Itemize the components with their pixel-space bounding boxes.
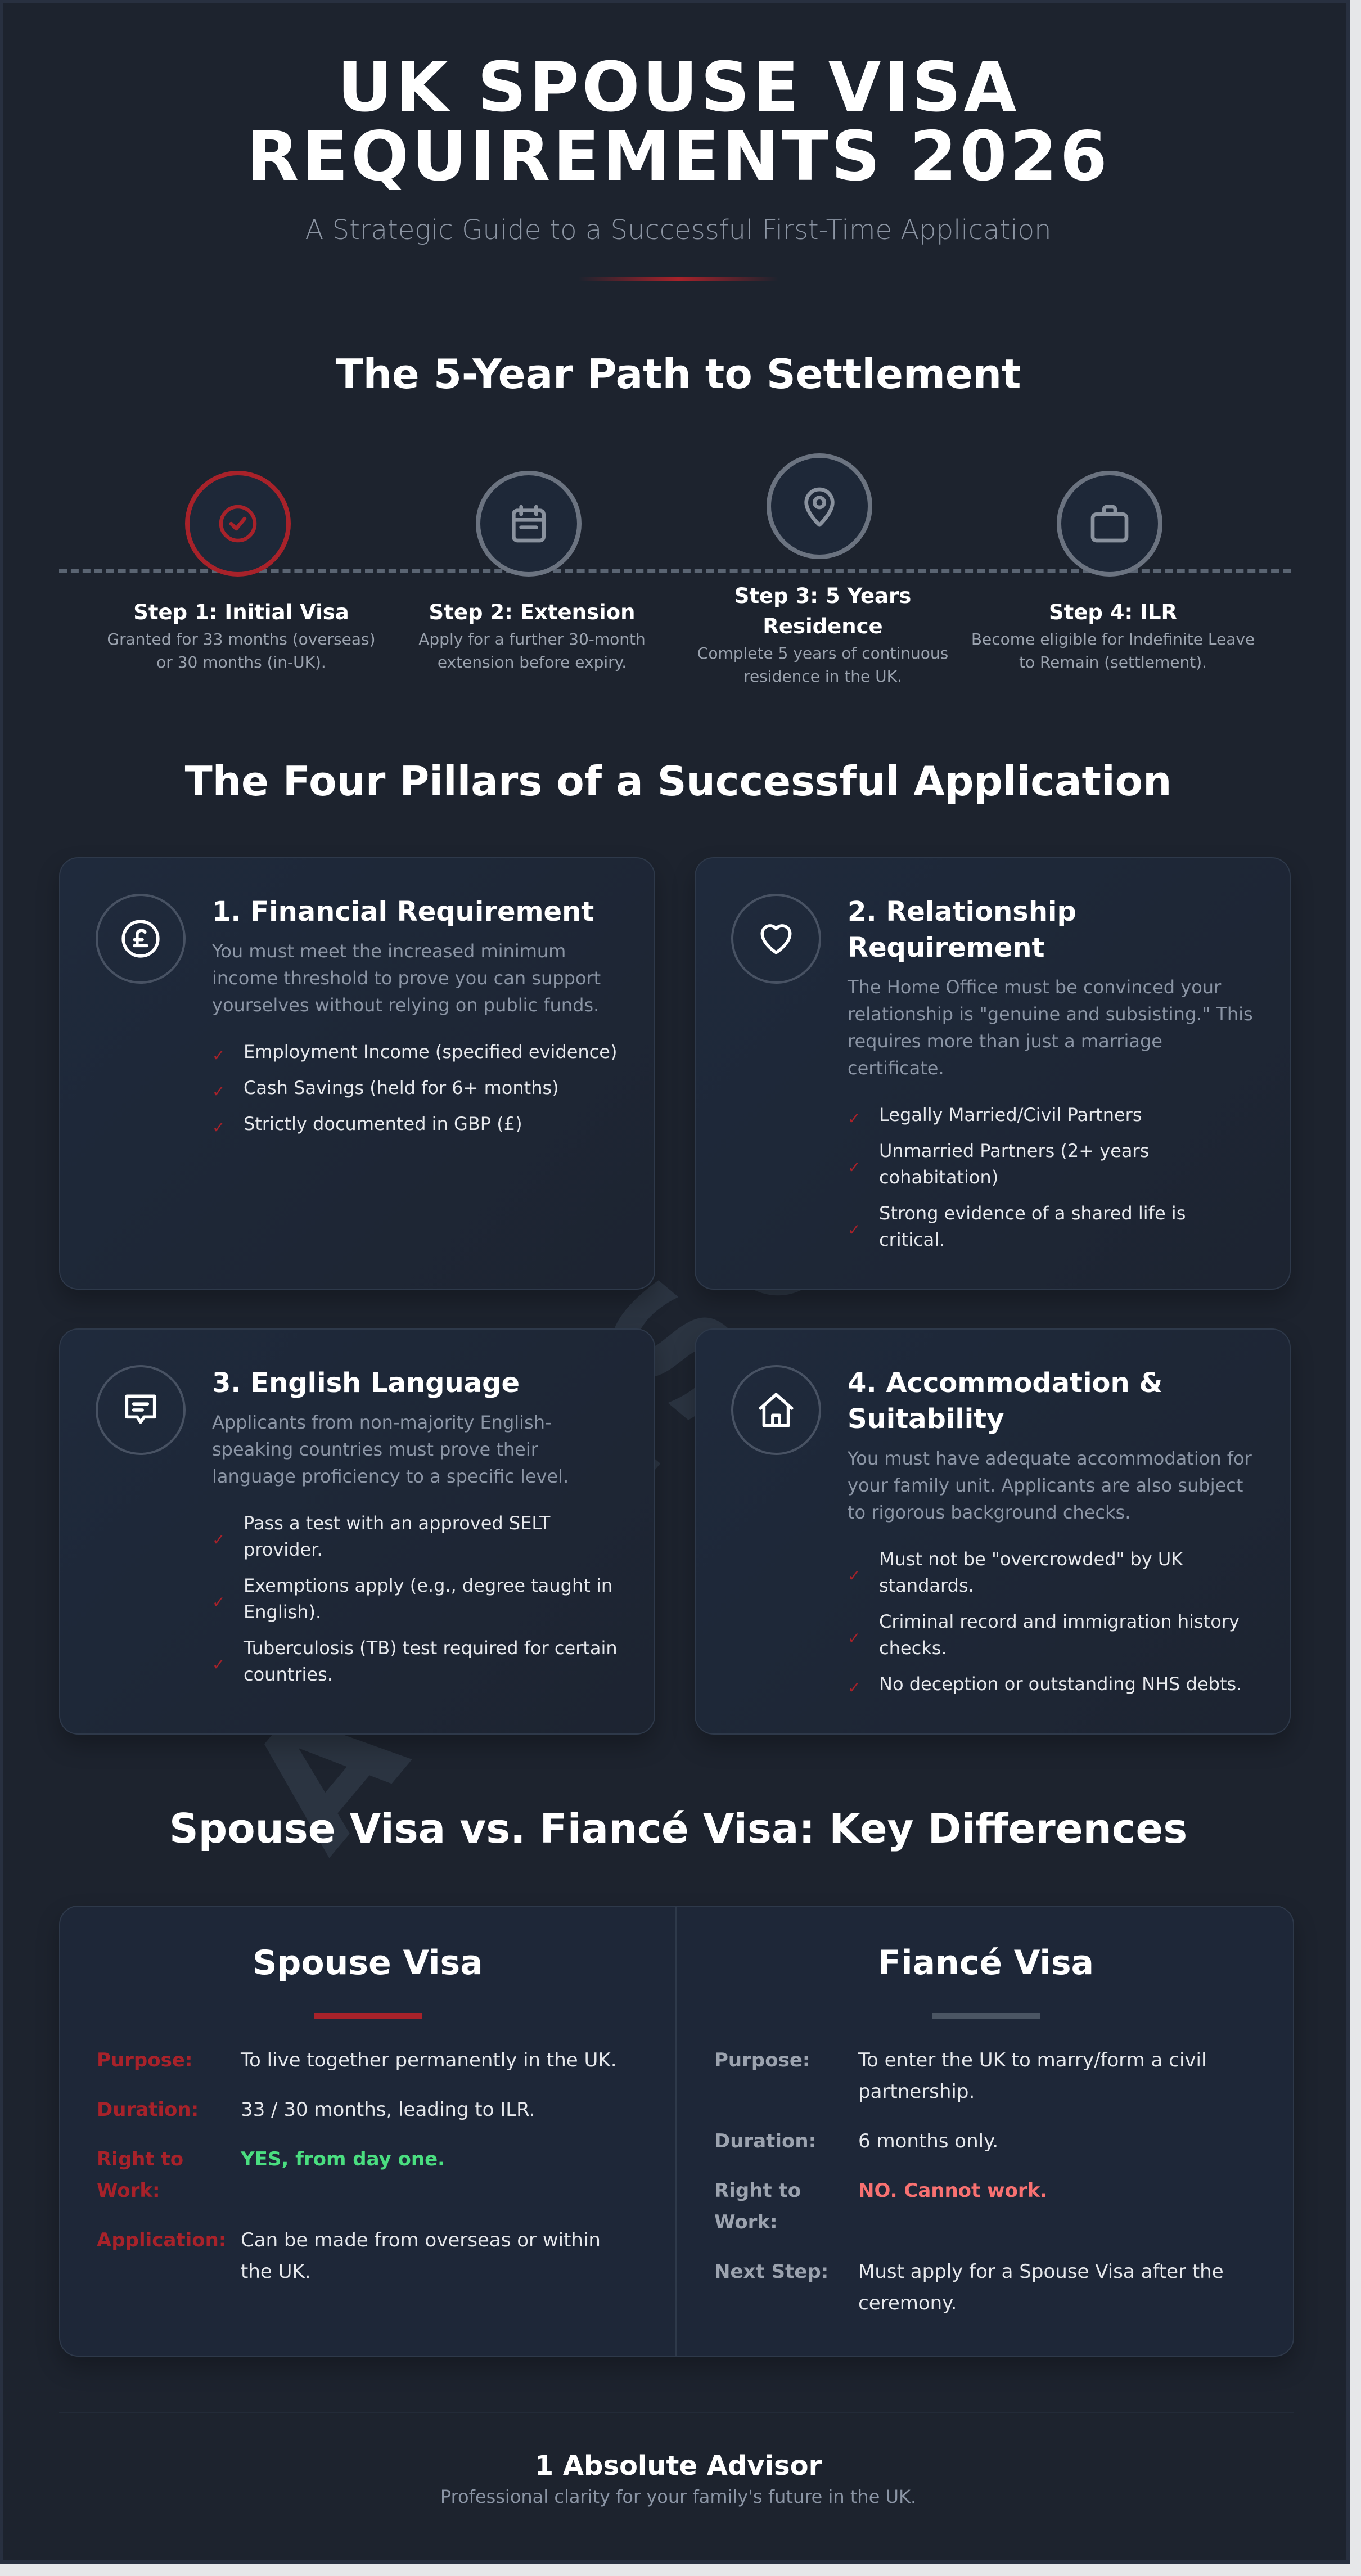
step 1 text <box>107 600 376 672</box>
step 4 text <box>971 600 1255 672</box>
panel: relationship: Strong evidence of a shared life is <box>879 1203 1186 1224</box>
column: spouse visa: To live together permanently in the UK. <box>241 2049 617 2071</box>
heading: 5-year path: The 5-Year Path to Settlement <box>336 350 1021 398</box>
step 4 text: Step 4: ILR <box>1049 600 1177 624</box>
panel: financial: You must meet the increased minimum income threshold to prove you can support yourselves without relying on public funds. <box>212 940 601 1016</box>
step 3 text: Complete 5 years of continuous residence in the UK. <box>697 644 948 686</box>
icon: step 3 pin <box>767 453 872 559</box>
column: fiance visa: NO. Cannot work. <box>858 2179 1047 2202</box>
panel: financial: 1. Financial Requirement <box>212 896 594 927</box>
title: REQUIREMENTS 2026 <box>246 117 1110 196</box>
panel: financial: Strictly documented in GBP (£) <box>244 1113 522 1134</box>
column: fiance visa: Purpose: <box>714 2049 810 2071</box>
comparison table <box>59 1906 1294 2357</box>
panel: accommodation: 4. Accommodation & Suitability <box>848 1367 1162 1435</box>
timeline <box>59 453 1291 686</box>
panel: accommodation: You must have adequate accommodation for your family unit. Applicants are also subject to rigorous background checks. <box>848 1448 1252 1523</box>
panel: accommodation <box>695 1328 1291 1735</box>
panel: relationship: Legally Married/Civil Partners <box>879 1104 1142 1125</box>
step 1 text: Step 1: Initial Visa <box>133 600 349 624</box>
column: fiance visa: Right to Work: <box>714 2179 801 2233</box>
panel: english: Exemptions apply (e.g., degree taught in English). <box>244 1575 612 1623</box>
step 3 text <box>697 584 948 686</box>
icon: step 4 briefcase <box>1057 471 1162 577</box>
column: fiance visa: Fiancé Visa <box>878 1943 1094 1983</box>
panel: english: Pass a test with an approved SELT provider. <box>244 1512 550 1560</box>
column: spouse visa: Application: <box>97 2229 226 2251</box>
panel: relationship: Unmarried Partners (2+ years cohabitation) <box>879 1140 1149 1188</box>
step 2 text: Apply for a further 30-month extension before expiry. <box>418 630 646 672</box>
column: spouse visa: 33 / 30 months, leading to ILR. <box>241 2098 535 2121</box>
column: spouse visa <box>60 1907 677 2356</box>
panel: financial <box>59 857 655 1290</box>
panel: accommodation: Criminal record and immigration history checks. <box>879 1611 1240 1659</box>
panel: relationship: The Home Office must be convinced your relationship is "genuine and subsisting." This requires more than just a marriage certificate. <box>848 976 1253 1079</box>
footer <box>440 2450 916 2507</box>
footer: Professional clarity for your family's future in the UK. <box>440 2486 916 2507</box>
column: spouse visa: Spouse Visa <box>253 1943 483 1983</box>
icon: step 1 check <box>185 471 291 577</box>
panel: relationship: critical. <box>879 1229 945 1250</box>
step 3 text: Step 3: 5 Years Residence <box>734 584 911 638</box>
step 2 text <box>418 600 646 672</box>
step 4 text: Become eligible for Indefinite Leave to Remain (settlement). <box>971 630 1255 672</box>
column: fiance visa: Next Step: <box>714 2260 828 2283</box>
title: UK SPOUSE VISA <box>337 48 1019 127</box>
panel: english <box>59 1328 655 1735</box>
column: spouse visa: Purpose: <box>97 2049 192 2071</box>
column: spouse visa: Right to Work: <box>97 2148 183 2202</box>
heading: comparison: Spouse Visa vs. Fiancé Visa: Key Differences <box>169 1805 1187 1852</box>
column: fiance visa: Must apply for a Spouse Visa after the ceremony. <box>858 2260 1224 2314</box>
step 1 text: Granted for 33 months (overseas) or 30 months (in-UK). <box>107 630 376 672</box>
column: spouse visa: Can be made from overseas or within the UK. <box>241 2229 601 2283</box>
column: spouse visa: YES, from day one. <box>241 2148 445 2170</box>
panel: english: Applicants from non-majority English-speaking countries must prove their language proficiency to a specific level. <box>212 1412 569 1487</box>
panel: accommodation: Must not be "overcrowded" by UK standards. <box>879 1548 1183 1596</box>
watermark: ADVISOR <box>209 980 1012 1884</box>
panel: relationship: 2. Relationship Requirement <box>848 896 1076 963</box>
subtitle: A Strategic Guide to a Successful First-Time Application <box>305 214 1051 246</box>
column: fiance visa: 6 months only. <box>858 2130 998 2152</box>
column: spouse visa: Duration: <box>97 2098 199 2121</box>
icon: speech <box>96 1365 186 1455</box>
icon: step 2 calendar <box>476 471 582 577</box>
icon: house <box>731 1365 821 1455</box>
footer: 1 Absolute Advisor <box>535 2450 822 2482</box>
title <box>246 48 1110 196</box>
panel: financial: Cash Savings (held for 6+ months) <box>244 1077 559 1098</box>
panel: english: 3. English Language <box>212 1367 520 1399</box>
accent line <box>578 277 778 281</box>
column: fiance visa <box>714 1943 1224 2314</box>
column: fiance visa: To enter the UK to marry/form a civil partnership. <box>858 2049 1206 2103</box>
column: fiance visa: Duration: <box>714 2130 816 2152</box>
panel: relationship <box>695 857 1291 1290</box>
heading: four pillars: The Four Pillars of a Successful Application <box>185 758 1171 805</box>
panel: accommodation: No deception or outstanding NHS debts. <box>879 1673 1242 1695</box>
icon: heart <box>731 894 821 984</box>
step 2 text: Step 2: Extension <box>429 600 635 624</box>
icon: pound <box>96 894 186 984</box>
panel: financial: Employment Income (specified evidence) <box>244 1041 617 1062</box>
panel: english: Tuberculosis (TB) test required for certain countries. <box>244 1637 618 1685</box>
